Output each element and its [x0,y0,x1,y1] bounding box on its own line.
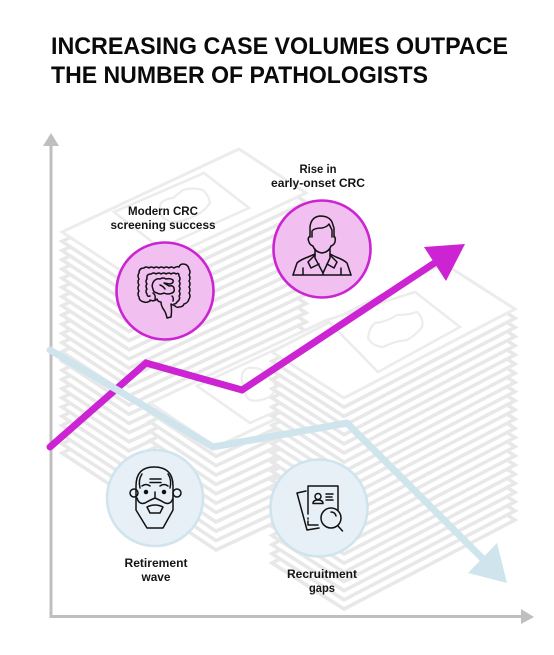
label: retirement wave: wave [140,572,170,584]
title: THE NUMBER OF PATHOLOGISTS [51,62,428,89]
label: retirement wave: Retirement [124,558,188,570]
stack of slides: middle [150,320,393,550]
label: modern CRC screening success: screening success [110,220,216,232]
stack of slides: front right [272,263,515,609]
icon: young man in magenta circle [274,200,370,298]
label: rise in early-onset CRC: Rise in [300,164,336,176]
icon: CV and magnifier in blue circle [270,460,368,556]
title [51,33,508,89]
title: INCREASING CASE VOLUMES OUTPACE [51,33,508,60]
label: recruitment gaps: gaps [309,583,335,595]
falling blue arrow: pathologists [50,350,507,583]
icon: intestine in magenta circle [116,242,214,340]
label: modern CRC screening success: Modern CRC [128,206,198,218]
stack of slides: back left [62,149,306,497]
label: recruitment gaps: Recruitment [287,569,357,581]
x axis arrow [50,609,534,624]
y axis arrow [43,133,59,618]
icon: older bearded man in blue circle [107,450,203,546]
label: rise in early-onset CRC: early-onset CRC [271,178,365,190]
rising magenta arrow: case volumes [50,244,465,447]
